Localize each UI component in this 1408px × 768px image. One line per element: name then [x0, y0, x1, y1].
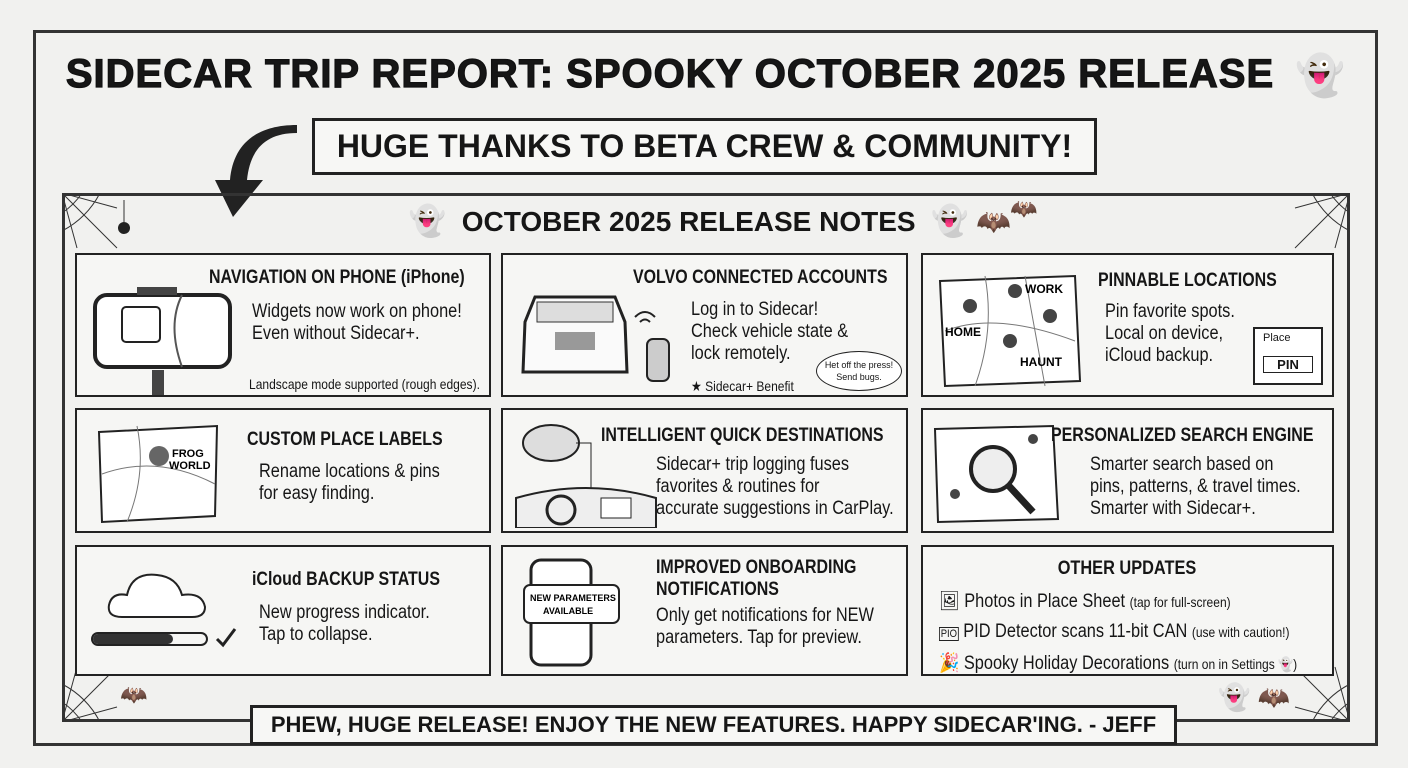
- panel: improved onboarding notifications: parameters. Tap for preview.: [656, 627, 862, 648]
- subtitle banner: HUGE THANKS TO BETA CREW & COMMUNITY!: [337, 128, 1072, 164]
- panel: navigation on phone: NAVIGATION ON PHONE (iPhone): [209, 267, 465, 288]
- panel: other updates: [921, 545, 1334, 676]
- panel: pinnable locations: PIN: [1277, 357, 1299, 372]
- panel: improved onboarding notifications: AVAILABLE: [543, 606, 593, 616]
- panel: custom place labels: FROG: [172, 448, 204, 460]
- panel: navigation on phone: Even without Sidecar+.: [252, 323, 420, 344]
- panel: improved onboarding notifications: NOTIFICATIONS: [656, 579, 779, 600]
- panel: pinnable locations: iCloud backup.: [1105, 345, 1213, 366]
- panel: icloud backup status: Tap to collapse.: [259, 624, 373, 645]
- decorations: webs and spider: [65, 196, 118, 248]
- panel: volvo connected accounts: [501, 253, 908, 397]
- panel: custom place labels: WORLD: [169, 460, 211, 472]
- callout: hot off the press: Send bugs.: [836, 372, 882, 382]
- panel: volvo connected accounts: VOLVO CONNECTED ACCOUNTS: [633, 267, 887, 288]
- callout: hot off the press: Het off the press!: [825, 360, 893, 370]
- panel: pinnable locations: HOME: [945, 325, 981, 339]
- panel: icloud backup status: iCloud BACKUP STATUS: [252, 569, 440, 590]
- panel: personalized search engine: [921, 408, 1334, 533]
- inner frame: [62, 193, 1350, 722]
- panel: navigation on phone: [75, 253, 491, 397]
- panel: pinnable locations: PINNABLE LOCATIONS: [1098, 270, 1277, 291]
- footer banner: [250, 705, 1177, 745]
- panel: pinnable locations: WORK: [1025, 282, 1063, 296]
- panel: icloud backup status: New progress indicator.: [259, 602, 430, 623]
- text: 🦇: [120, 682, 147, 707]
- panel: intelligent quick destinations: Sidecar+ trip logging fuses: [656, 454, 849, 475]
- decorations: bats and ghost: 🦇: [1010, 196, 1037, 221]
- panel: improved onboarding notifications: Only get notifications for NEW: [656, 605, 874, 626]
- panel: pinnable locations: [921, 253, 1334, 397]
- footer banner: PHEW, HUGE RELEASE! ENJOY THE NEW FEATURES. HAPPY SIDECAR'ING. - JEFF: [271, 712, 1156, 737]
- panel: personalized search engine: PERSONALIZED SEARCH ENGINE: [1051, 425, 1313, 446]
- panel: custom place labels: [75, 408, 491, 533]
- panel: improved onboarding notifications: [501, 545, 908, 676]
- panel: custom place labels: for easy finding.: [259, 483, 374, 504]
- panel: intelligent quick destinations: [501, 408, 908, 533]
- panel: other updates: 🖼 Photos in Place Sheet (tap for full-screen): [939, 591, 1231, 612]
- panel: custom place labels: Rename locations & pins: [259, 461, 440, 482]
- panel: navigation on phone: Landscape mode supported (rough edges).: [249, 376, 480, 392]
- panel: intelligent quick destinations: accurate suggestions in CarPlay.: [656, 498, 894, 519]
- panel: personalized search engine: pins, patterns, & travel times.: [1090, 476, 1301, 497]
- section heading: 👻 OCTOBER 2025 RELEASE NOTES 👻 🦇: [409, 205, 1011, 238]
- title: SIDECAR TRIP REPORT: SPOOKY OCTOBER 2025 RELEASE: [66, 52, 1274, 96]
- panel: personalized search engine: Smarter with Sidecar+.: [1090, 498, 1256, 519]
- panel: pinnable locations: Local on device,: [1105, 323, 1223, 344]
- panel: other updates: OTHER UPDATES: [1058, 558, 1196, 579]
- panel: improved onboarding notifications: IMPROVED ONBOARDING: [656, 557, 856, 578]
- callout: hot off the press: [816, 351, 902, 391]
- panel: personalized search engine: Smarter search based on: [1090, 454, 1273, 475]
- panel: pinnable locations: Place: [1263, 332, 1291, 344]
- panel: custom place labels: CUSTOM PLACE LABELS: [247, 429, 443, 450]
- panel: volvo connected accounts: ★ Sidecar+ Benefit: [691, 378, 794, 394]
- arrow: curved pointer: [215, 125, 297, 217]
- icon: title ghost: 👻: [1295, 54, 1345, 98]
- text: 👻 🦇: [1218, 682, 1290, 712]
- panel: volvo connected accounts: Check vehicle state &: [691, 321, 848, 342]
- panel: navigation on phone: Widgets now work on phone!: [252, 301, 462, 322]
- panel: pinnable locations: Pin favorite spots.: [1105, 301, 1235, 322]
- panel: volvo connected accounts: lock remotely.: [691, 343, 791, 364]
- panel: intelligent quick destinations: INTELLIGENT QUICK DESTINATIONS: [601, 425, 884, 446]
- panel: intelligent quick destinations: favorites & routines for: [656, 476, 819, 497]
- panel: other updates: PIO PID Detector scans 11-bit CAN (use with caution!): [941, 621, 1290, 642]
- panel: improved onboarding notifications: NEW PARAMETERS: [530, 593, 616, 603]
- panel: other updates: 🎉 Spooky Holiday Decorations (turn on in Settings 👻): [939, 653, 1297, 674]
- panel: volvo connected accounts: Log in to Sidecar!: [691, 299, 818, 320]
- subtitle banner: [312, 118, 1097, 175]
- panel: icloud backup status: [75, 545, 491, 676]
- panel: pinnable locations: HAUNT: [1020, 355, 1063, 369]
